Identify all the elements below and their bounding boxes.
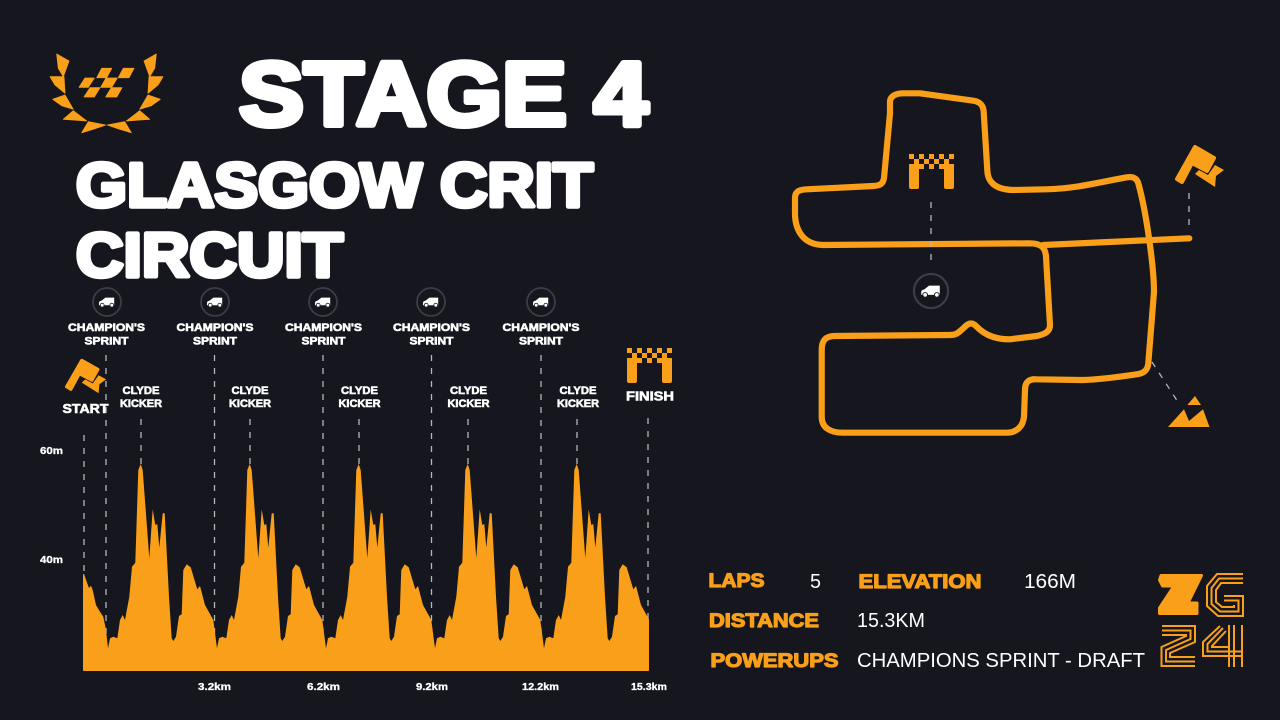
start label: START: [62, 401, 109, 416]
icon: finish arch: [627, 348, 672, 383]
stats block: [708, 570, 1145, 672]
course map track: [795, 93, 1189, 433]
sprint markers: SPRINT: [84, 336, 129, 348]
sprint markers: SPRINT: [193, 336, 237, 348]
elevation chart: [83, 464, 654, 671]
sprint markers: SPRINT: [519, 336, 563, 348]
stats block: POWERUPS: [710, 650, 838, 672]
climb labels: KICKER: [338, 398, 381, 410]
climb labels: CLYDE: [341, 385, 378, 397]
icon: map sprint van: [914, 274, 948, 308]
stats block: DISTANCE: [709, 610, 819, 632]
title: STAGE 4: [239, 45, 648, 145]
x axis labels: 3.2km: [198, 682, 231, 693]
chart guide lines: [84, 355, 648, 640]
logo: ZG24: [1160, 574, 1243, 667]
x axis labels: 9.2km: [416, 682, 448, 693]
y axis labels: 40m: [40, 555, 63, 566]
sprint markers: CHAMPION'S: [393, 322, 470, 334]
stats block: CHAMPIONS SPRINT - DRAFT: [857, 650, 1145, 672]
climb labels: [120, 385, 599, 410]
x axis labels: [198, 682, 667, 693]
finish label: FINISH: [626, 388, 674, 404]
stats block: 15.3KM: [857, 610, 925, 632]
x axis labels: 6.2km: [307, 682, 340, 693]
icon: laurel badge: [50, 54, 163, 133]
sprint markers: SPRINT: [410, 336, 454, 348]
stats block: 166M: [1024, 571, 1076, 593]
climb labels: KICKER: [557, 398, 599, 410]
icon: climb mountain: [1168, 396, 1210, 427]
x axis labels: 15.3km: [631, 682, 667, 693]
stats block: ELEVATION: [858, 571, 982, 593]
y axis labels: 60m: [40, 446, 63, 457]
y axis labels: [40, 446, 63, 566]
sprint markers: CHAMPION'S: [68, 322, 145, 334]
sprint markers: CHAMPION'S: [502, 322, 580, 334]
sprint markers: SPRINT: [302, 336, 346, 348]
climb labels: CLYDE: [560, 385, 596, 397]
map guide lines: [931, 193, 1189, 402]
climb labels: CLYDE: [122, 385, 160, 397]
stats block: LAPS: [708, 570, 764, 592]
climb labels: CLYDE: [450, 385, 487, 397]
icon: map finish arch: [909, 154, 954, 189]
climb labels: CLYDE: [232, 385, 268, 397]
climb labels: KICKER: [229, 398, 271, 410]
sprint markers: [68, 288, 580, 348]
stats block: 5: [810, 571, 821, 593]
climb labels: KICKER: [120, 398, 162, 410]
climb labels: KICKER: [448, 398, 490, 410]
icon: map start flag: [1177, 147, 1224, 187]
subtitle line 2: CIRCUIT: [76, 222, 343, 290]
subtitle line 1: GLASGOW CRIT: [76, 152, 593, 220]
sprint markers: CHAMPION'S: [285, 322, 362, 334]
icon: start flag: [67, 360, 106, 393]
sprint markers: CHAMPION'S: [176, 322, 254, 334]
x axis labels: 12.2km: [522, 682, 559, 693]
